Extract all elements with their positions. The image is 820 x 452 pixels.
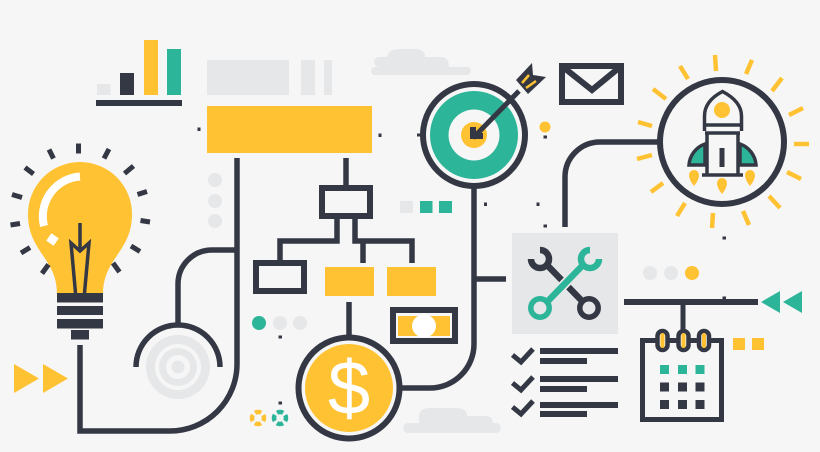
icon: envelope xyxy=(562,66,621,102)
gray header blocks xyxy=(207,60,332,95)
icon: light bulb xyxy=(10,144,150,340)
flowchart top box xyxy=(322,188,370,216)
icon: rocket xyxy=(637,55,809,228)
small chips xyxy=(252,412,286,424)
timeline bar xyxy=(624,299,758,332)
bulb base xyxy=(57,293,103,340)
calendar rings xyxy=(658,331,709,350)
target rings xyxy=(423,84,525,186)
status dots xyxy=(252,316,307,330)
arrows: yellow fast-forward xyxy=(14,364,68,393)
bar chart xyxy=(96,40,182,106)
rocket wings xyxy=(689,144,756,165)
icon: calendar xyxy=(642,331,722,420)
arrow xyxy=(470,63,546,139)
dollar sign: $ xyxy=(328,346,370,431)
icon: gray radar xyxy=(136,325,220,399)
checkmarks xyxy=(512,349,533,414)
radar rings xyxy=(146,335,210,399)
bulb highlight xyxy=(43,176,80,246)
rocket sun rays xyxy=(637,55,809,228)
yellow title block xyxy=(207,106,372,153)
rocket circle xyxy=(660,80,784,204)
connector lines xyxy=(80,142,660,431)
dark wrench xyxy=(531,250,598,317)
scattered small dots xyxy=(198,128,726,404)
calendar teal dates xyxy=(660,365,704,374)
flowchart branches xyxy=(280,219,412,263)
icon: banknote xyxy=(393,310,455,341)
rocket flames xyxy=(689,170,755,194)
rocket window xyxy=(714,102,730,118)
icon: target with arrow xyxy=(423,63,546,186)
bulb filament xyxy=(71,223,89,293)
icon: crossed wrenches xyxy=(512,233,618,334)
cloud: bottom xyxy=(403,408,501,433)
rocket door xyxy=(720,148,724,167)
progress dots xyxy=(643,266,699,280)
calendar dark dates xyxy=(660,382,704,409)
yellow squares xyxy=(733,338,764,350)
icon: dollar coin xyxy=(298,338,400,438)
bulb glass xyxy=(28,162,132,294)
flowchart left box xyxy=(256,263,304,291)
teal legend squares xyxy=(400,201,452,213)
gray dots column xyxy=(208,173,222,228)
checklist lines xyxy=(540,348,618,417)
calendar ring highlights xyxy=(660,333,706,348)
flowchart xyxy=(256,188,436,296)
checklist xyxy=(512,348,618,417)
arrows: teal rewind xyxy=(761,291,802,313)
flowchart yellow boxes xyxy=(325,267,436,296)
bulb rays xyxy=(10,144,150,274)
wrench panel xyxy=(512,233,618,334)
yellow dot xyxy=(540,122,550,132)
radar arc xyxy=(136,325,220,367)
cloud: top xyxy=(371,49,471,75)
calendar frame xyxy=(642,340,722,420)
rocket body xyxy=(702,92,743,175)
teal wrench xyxy=(531,250,599,317)
